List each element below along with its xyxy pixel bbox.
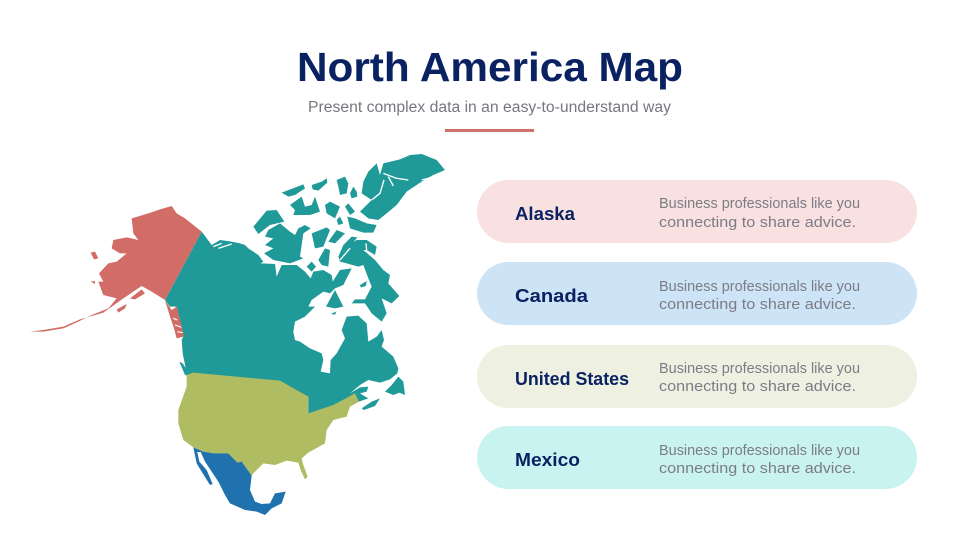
St Lawrence Island xyxy=(91,252,98,259)
Kenai Peninsula xyxy=(130,289,145,299)
description: United States: Business professionals like you xyxy=(659,360,860,377)
description: Canada xyxy=(659,278,860,313)
label: Canada: Canada xyxy=(515,285,589,306)
panel: Canada xyxy=(477,262,917,325)
map region: Mexico xyxy=(193,447,286,515)
description: United States: connecting to share advice. xyxy=(659,378,856,395)
panel: United States xyxy=(477,345,917,408)
panel: Alaska xyxy=(477,180,917,243)
description: Mexico: Business professionals like you xyxy=(659,442,860,459)
Kodiak Island xyxy=(117,304,127,313)
Nova Scotia xyxy=(362,398,380,410)
Canadian mainland xyxy=(165,232,398,417)
subtitle: Present complex data in an easy-to-understand way xyxy=(308,99,671,116)
Alaska panhandle xyxy=(165,300,184,338)
description: United States xyxy=(659,360,860,395)
panel: Mexico xyxy=(477,426,917,489)
label: Alaska: Alaska xyxy=(515,203,576,224)
map region: United States xyxy=(178,373,359,479)
description: Canada: Business professionals like you xyxy=(659,278,860,295)
map: North America xyxy=(30,154,445,515)
description: Alaska: Business professionals like you xyxy=(659,195,860,212)
description: Canada: connecting to share advice. xyxy=(659,296,856,313)
label: United States: United States xyxy=(515,368,629,389)
Arctic islands xyxy=(253,154,445,322)
description: Mexico: connecting to share advice. xyxy=(659,460,856,477)
Vancouver Island xyxy=(179,362,192,377)
description: Alaska xyxy=(659,195,860,231)
title: North America Map xyxy=(297,44,683,90)
description: Mexico xyxy=(659,442,860,477)
map region: Alaska xyxy=(30,206,202,338)
description: Alaska: connecting to share advice. xyxy=(659,214,856,231)
Nunivak Island xyxy=(91,281,95,284)
map region: Canada xyxy=(165,154,445,425)
title underline xyxy=(445,129,534,132)
Newfoundland xyxy=(385,377,405,395)
Alaska mainland xyxy=(30,206,202,332)
label: Mexico: Mexico xyxy=(515,449,580,470)
